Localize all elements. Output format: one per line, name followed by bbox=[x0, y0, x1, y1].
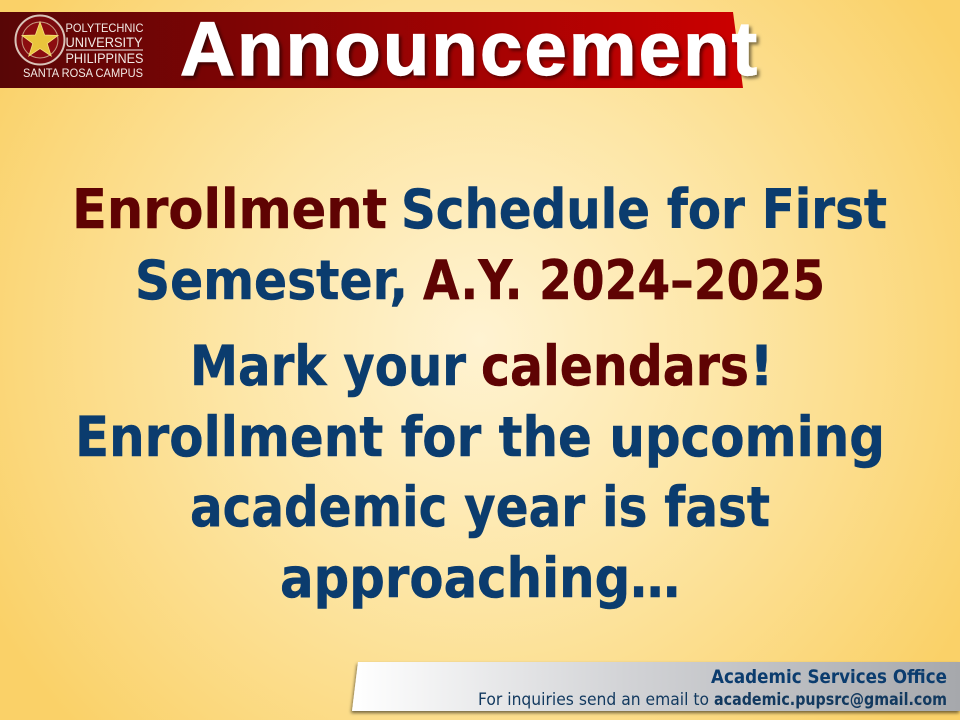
red banner shape bbox=[0, 12, 743, 88]
logo wordmark: SANTA ROSA CAMPUS bbox=[23, 66, 143, 80]
message line 3: academic year is fast bbox=[190, 475, 770, 539]
message line 1: ! bbox=[749, 334, 774, 398]
logo wordmark: PHILIPPINES bbox=[66, 50, 144, 66]
heading line 1 bbox=[72, 178, 887, 241]
icon: university seal bbox=[16, 16, 64, 64]
logo wordmark: UNIVERSITY bbox=[66, 34, 143, 50]
logo wordmark bbox=[23, 21, 144, 80]
heading line 2 bbox=[135, 249, 825, 312]
message line 1 bbox=[190, 334, 774, 398]
message line 1: Mark your bbox=[190, 334, 466, 398]
heading line 2: A.Y. 2024–2025 bbox=[423, 249, 825, 312]
banner title: Announcement bbox=[180, 7, 757, 92]
inquiry line: For inquiries send an email to bbox=[478, 690, 709, 710]
main heading bbox=[72, 178, 887, 312]
inquiry line bbox=[478, 690, 947, 710]
message line 1: calendars bbox=[481, 334, 749, 398]
message line 2: Enrollment for the upcoming bbox=[75, 405, 885, 469]
footer contact panel bbox=[352, 662, 960, 711]
header banner bbox=[0, 7, 757, 92]
heading line 1: Schedule for First bbox=[401, 178, 887, 241]
footer plate bbox=[352, 662, 960, 711]
heading line 1: Enrollment bbox=[72, 178, 387, 241]
body message bbox=[75, 334, 885, 610]
heading line 2: Semester, bbox=[135, 249, 408, 312]
message line 4: approaching… bbox=[280, 546, 680, 610]
logo wordmark: POLYTECHNIC bbox=[66, 21, 144, 35]
